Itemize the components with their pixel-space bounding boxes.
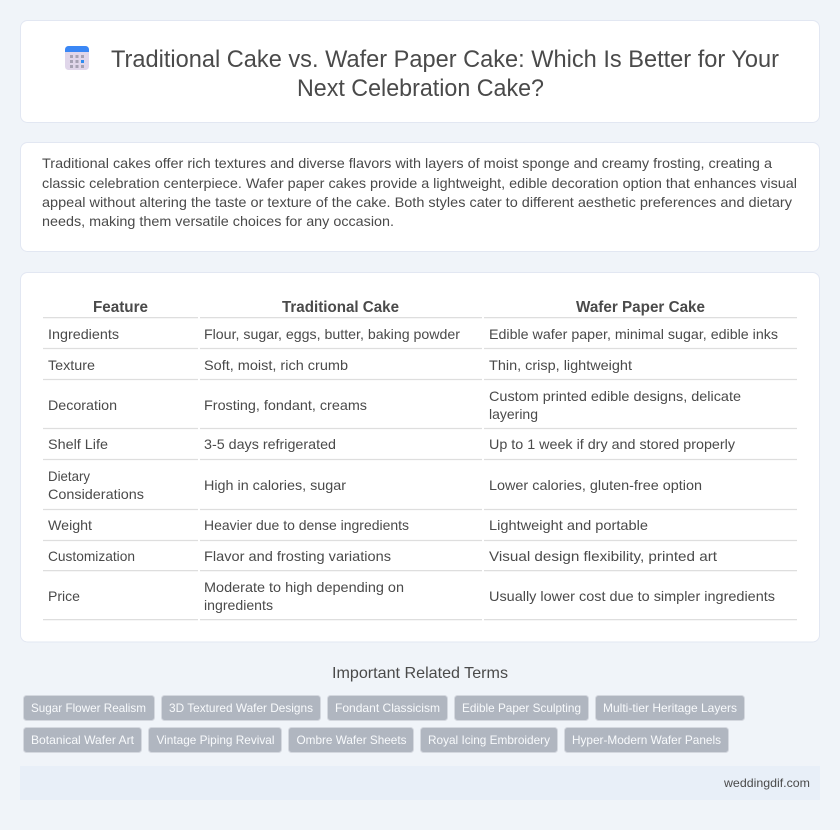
row: shelf life: Shelf Life [48,436,108,452]
row: price: Usually lower cost due to simpler ingredients [489,588,775,604]
tag [148,728,282,752]
icon: calendar [65,46,89,70]
intro text: Traditional cakes offer rich textures and diverse flavors with layers of moist sponge and creamy frosting, creating a [42,155,772,171]
table header: Wafer Paper Cake [576,299,705,316]
row: shelf life: Up to 1 week if dry and stored properly [489,436,735,452]
tag [596,696,744,720]
intro text: classic celebration centerpiece. Wafer paper cakes provide a lightweight, edible decoration option that enhances visual [42,175,797,191]
tag [328,696,448,720]
tag [288,728,414,752]
row: dietary considerations: Considerations [48,486,144,502]
row: decoration: Decoration [48,397,117,413]
row: texture [48,357,632,373]
row: dietary considerations [48,468,702,502]
row: customization [48,548,717,564]
tag: Royal Icing Embroidery [428,733,550,747]
row: ingredients [48,326,778,342]
related term tags [24,696,744,752]
row: shelf life: 3-5 days refrigerated [204,436,336,452]
row: shelf life [48,436,735,452]
header panel [20,20,820,122]
related terms heading: Important Related Terms [332,665,508,682]
tag: Sugar Flower Realism [31,701,146,715]
footer text: weddingdif.com [723,776,810,790]
table header: Traditional Cake [282,299,399,316]
row: texture: Thin, crisp, lightweight [489,357,632,373]
row: customization: Flavor and frosting variations [204,548,391,564]
tag: Botanical Wafer Art [31,733,135,747]
row: decoration: Custom printed edible designs, delicate [489,388,741,404]
title: Next Celebration Cake? [297,75,544,102]
row: customization: Customization [48,548,135,564]
tag: Ombre Wafer Sheets [296,733,406,747]
row: decoration [48,388,741,422]
tag [454,696,588,720]
row: weight: Heavier due to dense ingredients [204,517,409,533]
intro panel [20,142,820,252]
tag [420,728,558,752]
tag [24,728,142,752]
tag: Multi-tier Heritage Layers [603,701,737,715]
row: price [48,579,775,613]
row: dietary considerations: Lower calories, gluten-free option [489,477,702,493]
tag: 3D Textured Wafer Designs [169,701,313,715]
footer bar [20,766,820,800]
tag: Hyper-Modern Wafer Panels [572,733,721,747]
comparison table panel [20,272,820,642]
tag [162,696,320,720]
row: decoration: layering [489,406,538,422]
row: dietary considerations: High in calories, sugar [204,477,346,493]
row: weight: Lightweight and portable [489,517,648,533]
row: texture: Texture [48,357,95,373]
row: decoration: Frosting, fondant, creams [204,397,367,413]
tag: Edible Paper Sculpting [462,701,581,715]
row: customization: Visual design flexibility, printed art [489,548,717,564]
table header [93,299,705,316]
row: dietary considerations: Dietary [48,468,90,484]
title: Traditional Cake vs. Wafer Paper Cake: Which Is Better for Your [111,46,779,73]
tag [564,728,728,752]
row: price: ingredients [204,597,273,613]
row: texture: Soft, moist, rich crumb [204,357,348,373]
intro text [42,155,797,229]
row: price: Price [48,588,80,604]
tag: Vintage Piping Revival [156,733,274,747]
title [111,46,779,102]
row: price: Moderate to high depending on [204,579,404,595]
intro text: needs, making them versatile choices for any occasion. [42,213,394,229]
row: weight: Weight [48,517,92,533]
row: ingredients: Flour, sugar, eggs, butter, baking powder [204,326,460,342]
tag: Fondant Classicism [335,701,440,715]
tag [24,696,154,720]
intro text: appeal without altering the taste or texture of the cake. Both styles cater to different aesthetic preferences and dietary [42,194,792,210]
row: ingredients: Edible wafer paper, minimal sugar, edible inks [489,326,778,342]
row: ingredients: Ingredients [48,326,119,342]
table header: Feature [93,299,148,316]
row: weight [48,517,648,533]
